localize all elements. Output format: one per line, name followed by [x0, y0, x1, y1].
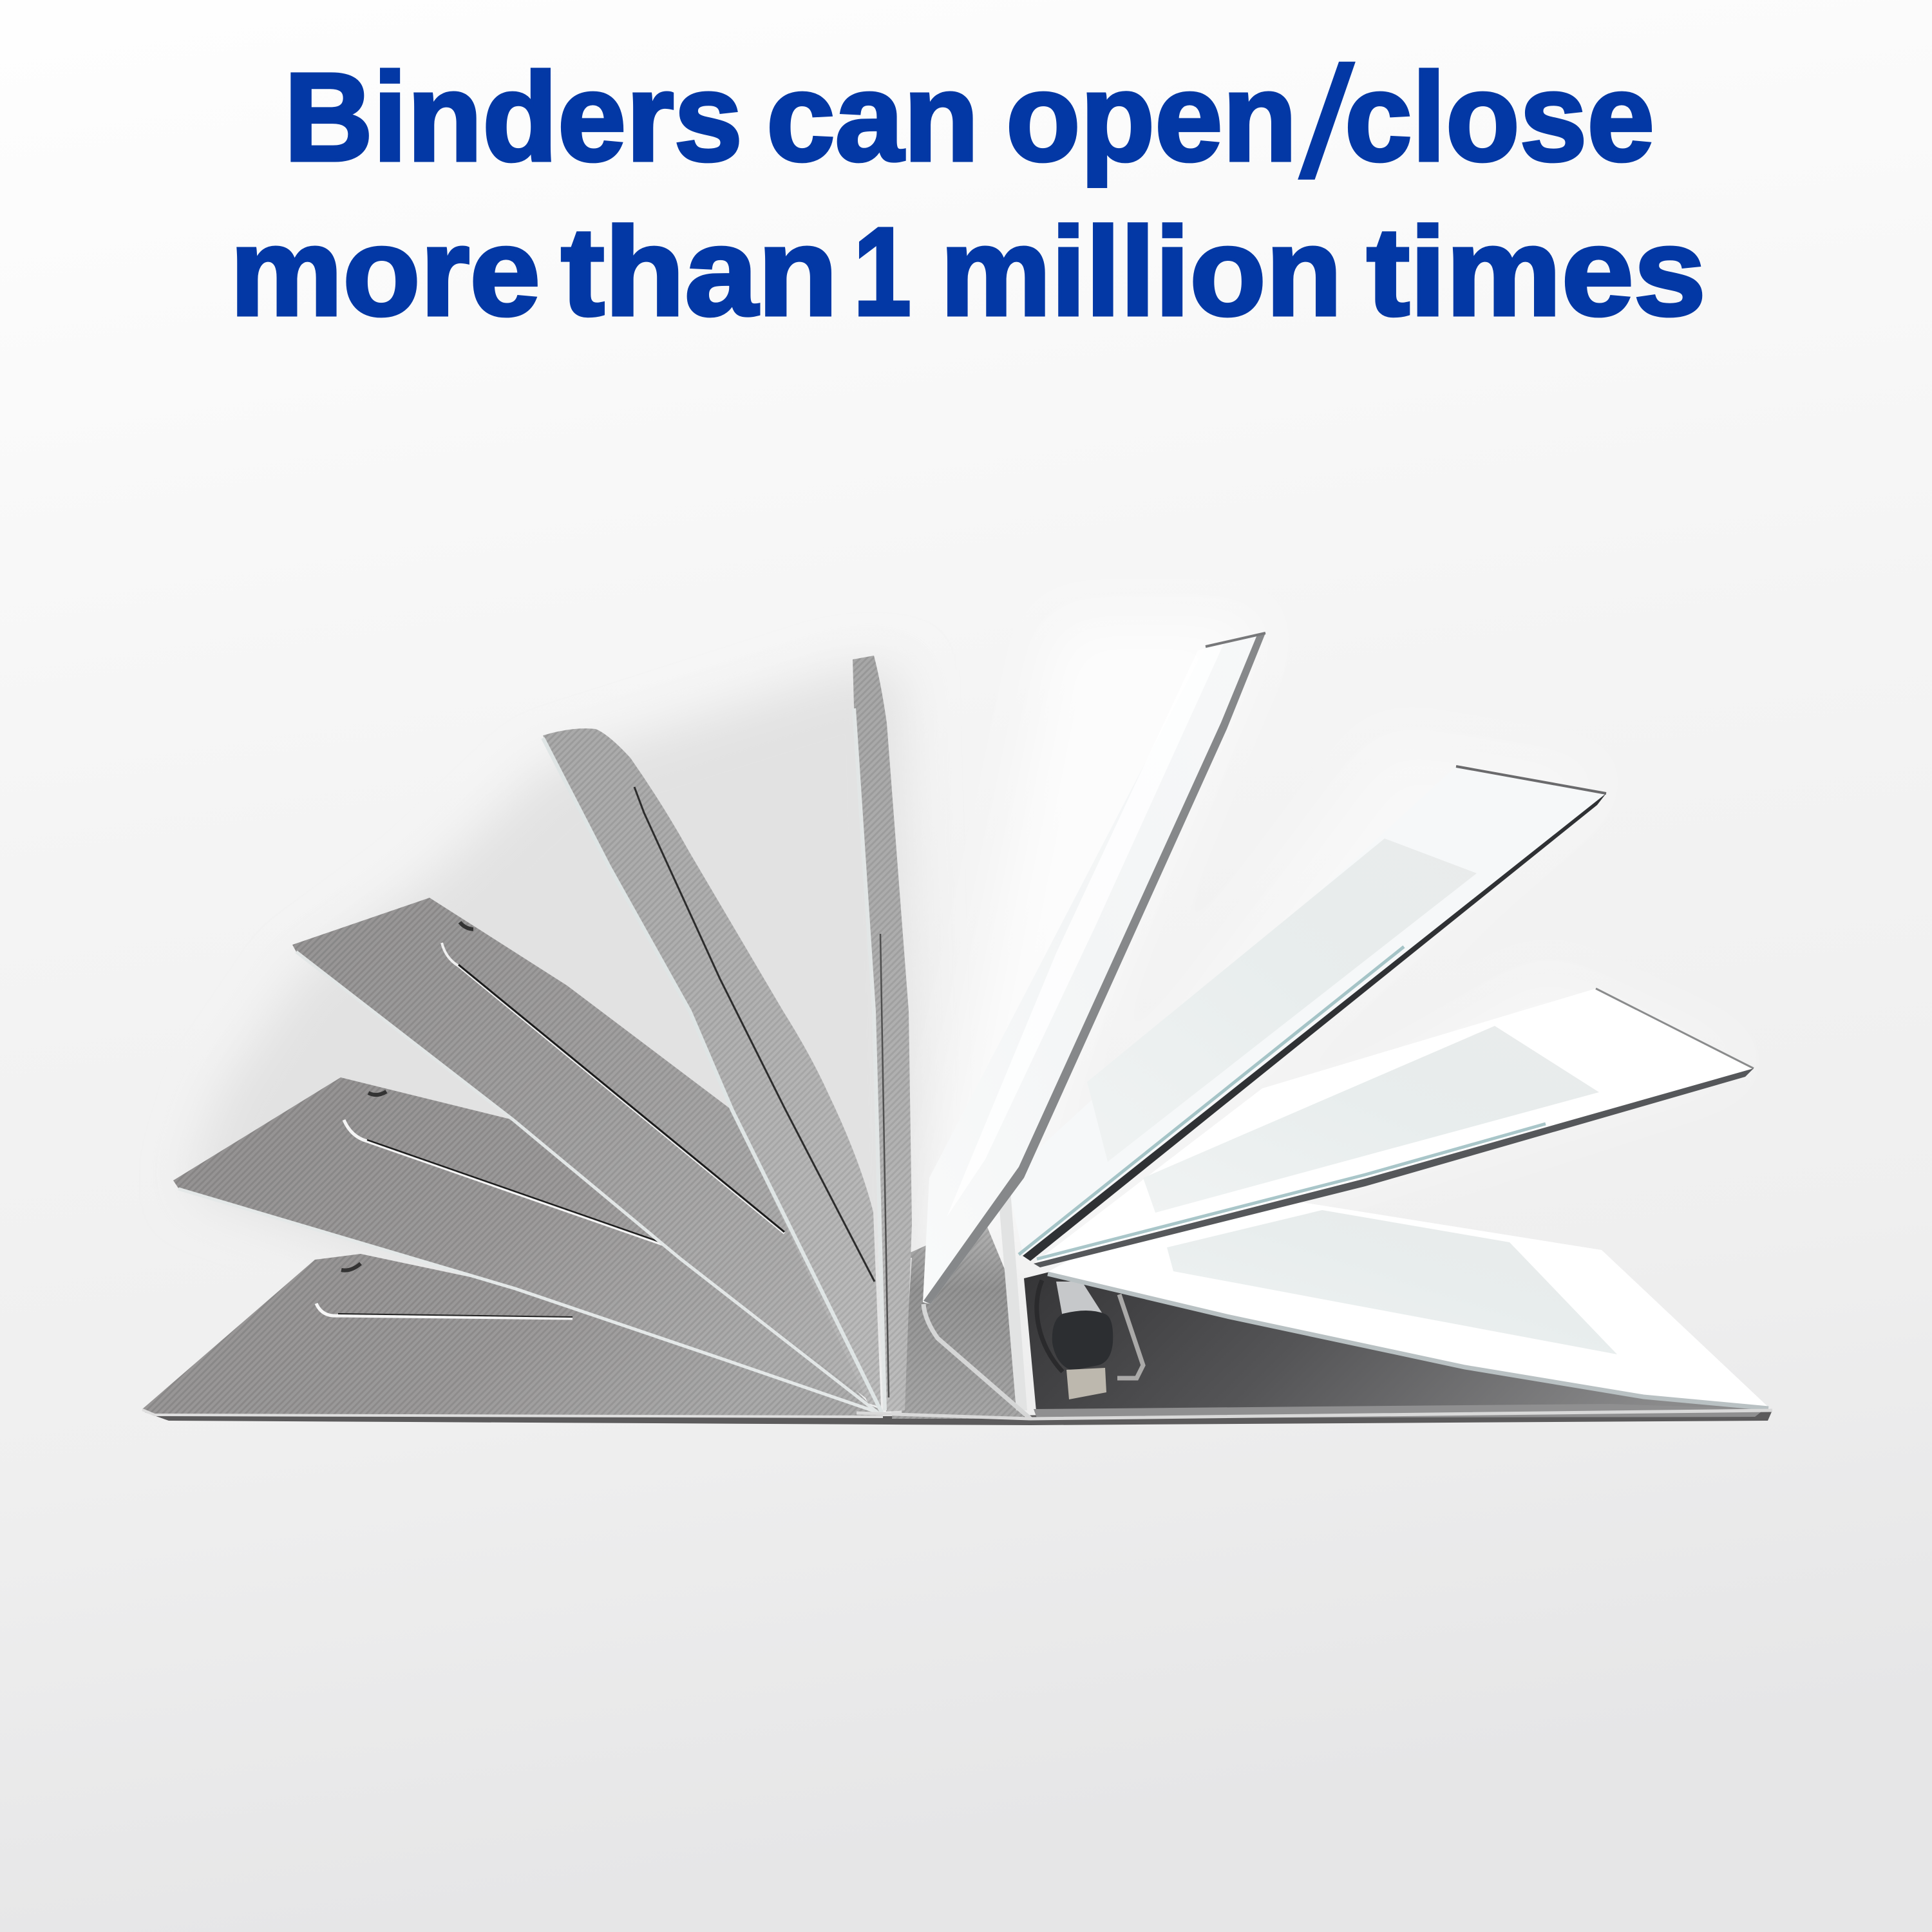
interior bottom strip	[1034, 1404, 1765, 1418]
cover panel 2	[1034, 989, 1754, 1267]
hinge base edge highlight	[857, 1410, 1772, 1419]
cover panel 4	[923, 633, 1265, 1304]
ring mechanism	[1037, 1280, 1143, 1399]
title word: more: more	[230, 202, 540, 342]
grey blade E	[853, 656, 912, 1412]
title	[230, 33, 1706, 342]
binder fan	[142, 633, 1772, 1425]
black lever	[1052, 1311, 1113, 1370]
title word: million: million	[940, 202, 1342, 342]
bottom cover panel	[1048, 1202, 1768, 1408]
clear edge of cover	[923, 1304, 1030, 1419]
silver clip	[1066, 1368, 1106, 1399]
title word: close: close	[1345, 47, 1654, 187]
grey blade B	[173, 1077, 876, 1412]
metal rings and rail	[1056, 1282, 1103, 1317]
title numeral: 1: 1	[853, 202, 911, 342]
soft shadow fan behind grey blades	[193, 670, 921, 1352]
title word: times: times	[1367, 202, 1706, 342]
grey blade D	[543, 728, 882, 1414]
cover panel 3	[1007, 766, 1606, 1261]
title word: Binders: Binders	[284, 47, 743, 187]
spine panel	[891, 1219, 1024, 1419]
title word: can: can	[766, 47, 979, 187]
title word: open: open	[1006, 47, 1297, 187]
inner hinge strip	[997, 1179, 1027, 1410]
grey blade A	[142, 1254, 883, 1417]
light sweep around clear blades	[921, 618, 1752, 1288]
grey blade C	[292, 898, 882, 1414]
binder interior	[1024, 1272, 1765, 1418]
title word: than: than	[561, 202, 838, 342]
base cover edge	[145, 1410, 1772, 1425]
title slash: /	[1298, 33, 1355, 212]
